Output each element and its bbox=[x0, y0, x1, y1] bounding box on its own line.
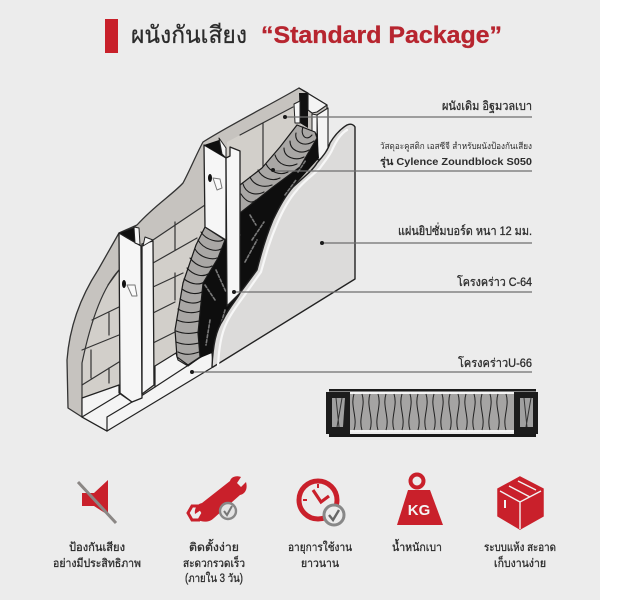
icon: muted speaker bbox=[78, 480, 116, 523]
wall cross-section bbox=[326, 389, 538, 437]
benefit: quick install: สะดวกรวดเร็ว bbox=[183, 555, 245, 570]
label: acoustic material bbox=[380, 141, 532, 169]
title: ผนังกันเสียง bbox=[131, 22, 247, 49]
benefit: sound protection: ป้องกันเสียง bbox=[69, 541, 125, 554]
benefit: dry clean system: ระบบแห้ง สะอาด bbox=[484, 541, 556, 554]
benefit: sound protection: อย่างมีประสิทธิภาพ bbox=[53, 557, 141, 570]
benefit: light weight: น้ำหนักเบา bbox=[392, 539, 442, 554]
benefit: sound protection bbox=[53, 541, 141, 570]
acoustic wool lower bbox=[175, 227, 225, 365]
leader lines bbox=[190, 115, 532, 374]
existing lightweight brick wall bbox=[67, 88, 327, 431]
benefit: dry clean system bbox=[484, 541, 556, 570]
label: existing wall: ผนังเดิม อิฐมวลเบา bbox=[442, 99, 532, 113]
benefit: long life bbox=[288, 541, 352, 570]
black acoustic membrane bbox=[190, 132, 319, 358]
rear stud bbox=[294, 88, 328, 160]
icon: clock with check bbox=[299, 481, 344, 525]
label: acoustic material: รุ่น Cylence Zoundblock S050 bbox=[380, 156, 532, 169]
middle stud C-64 bbox=[204, 138, 240, 306]
label: C-64: โครงคร่าว C-64 bbox=[457, 275, 532, 289]
label: gypsum board: แผ่นยิปซั่มบอร์ด หนา 12 มม. bbox=[398, 222, 532, 238]
label: U-66: โครงคร่าวU-66 bbox=[458, 356, 532, 370]
front stud C-64 bbox=[119, 227, 154, 402]
gypsum board bbox=[212, 124, 355, 367]
acoustic wool upper bbox=[240, 125, 317, 213]
benefit: long life: อายุการใช้งาน bbox=[288, 541, 352, 554]
icon: weight KG bbox=[397, 474, 443, 525]
benefit: quick install: (ภายใน 3 วัน) bbox=[185, 572, 243, 585]
icon: cardboard box bbox=[498, 477, 543, 529]
title bbox=[105, 19, 502, 53]
icon: wrench with check bbox=[188, 476, 247, 522]
label: acoustic material: วัสดุอะคูสติก เอสซีจี สำหรับผนังป้องกันเสียง bbox=[380, 141, 532, 152]
title: “Standard Package” bbox=[261, 22, 502, 49]
wall diagram bbox=[67, 88, 355, 431]
benefit: long life: ยาวนาน bbox=[301, 558, 339, 570]
bottom track U-66 bbox=[82, 352, 213, 431]
icon: weight KG: KG bbox=[408, 502, 430, 519]
benefit: quick install bbox=[183, 539, 245, 585]
benefit: dry clean system: เก็บงานง่าย bbox=[494, 555, 546, 570]
benefit: quick install: ติดตั้งง่าย bbox=[189, 539, 239, 554]
